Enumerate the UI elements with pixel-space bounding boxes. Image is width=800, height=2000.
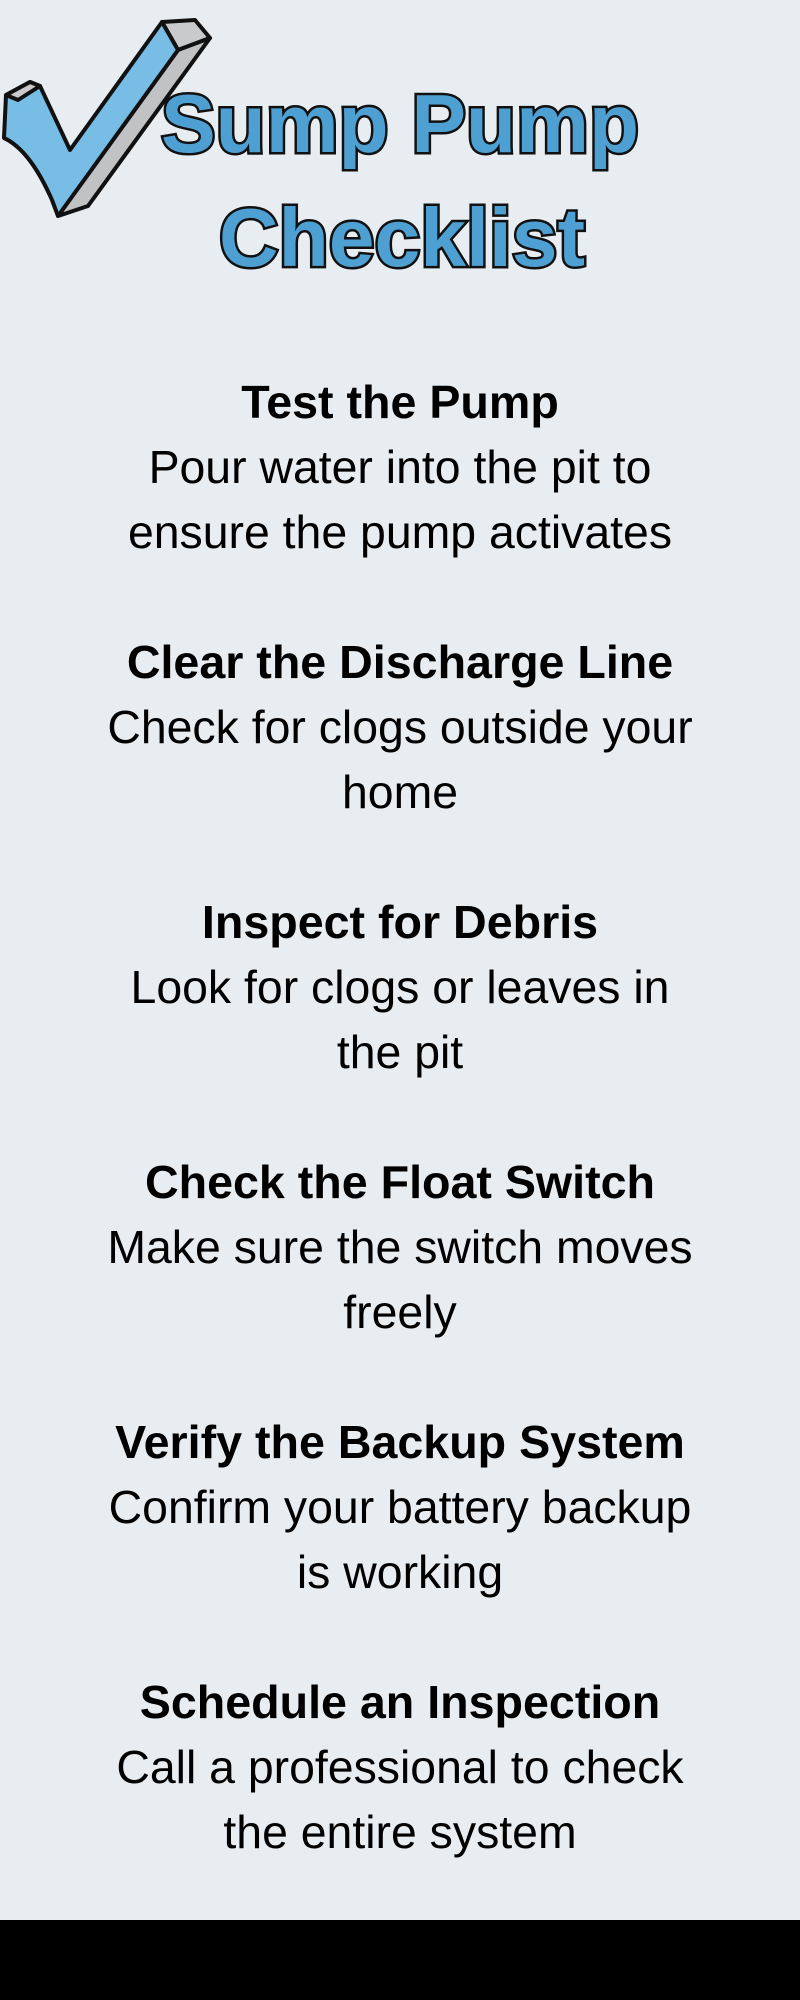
title: Checklist — [219, 191, 585, 284]
header: checkmark and title — [2, 18, 639, 284]
item: float switch: Check the Float Switch — [145, 1156, 655, 1208]
item: float switch: freely — [343, 1286, 457, 1338]
item: schedule inspection — [116, 1676, 684, 1858]
item: test the pump — [128, 376, 672, 558]
item: float switch: Make sure the switch moves — [107, 1221, 693, 1273]
footer bar — [0, 1920, 800, 2000]
item: test the pump: Pour water into the pit to — [149, 441, 651, 493]
item: schedule inspection: Call a professional to check — [116, 1741, 684, 1793]
item: inspect for debris: Look for clogs or leaves in — [131, 961, 669, 1013]
item: backup system: Verify the Backup System — [115, 1416, 685, 1468]
item: schedule inspection: Schedule an Inspection — [140, 1676, 660, 1728]
item: test the pump: Test the Pump — [241, 376, 559, 428]
item: inspect for debris — [131, 896, 669, 1078]
item: float switch — [107, 1156, 693, 1338]
item: clear discharge line: Clear the Discharge Line — [127, 636, 673, 688]
title — [161, 77, 639, 284]
item: backup system: Confirm your battery backup — [109, 1481, 691, 1533]
item: backup system — [109, 1416, 691, 1598]
item: clear discharge line: home — [342, 766, 458, 818]
icon: 3D checkmark — [4, 20, 210, 216]
item: inspect for debris: Inspect for Debris — [202, 896, 598, 948]
item: schedule inspection: the entire system — [223, 1806, 577, 1858]
item: backup system: is working — [297, 1546, 503, 1598]
item: clear discharge line — [107, 636, 693, 818]
title: Sump Pump — [161, 77, 639, 170]
item: inspect for debris: the pit — [337, 1026, 463, 1078]
item: clear discharge line: Check for clogs outside your — [107, 701, 693, 753]
item: test the pump: ensure the pump activates — [128, 506, 672, 558]
